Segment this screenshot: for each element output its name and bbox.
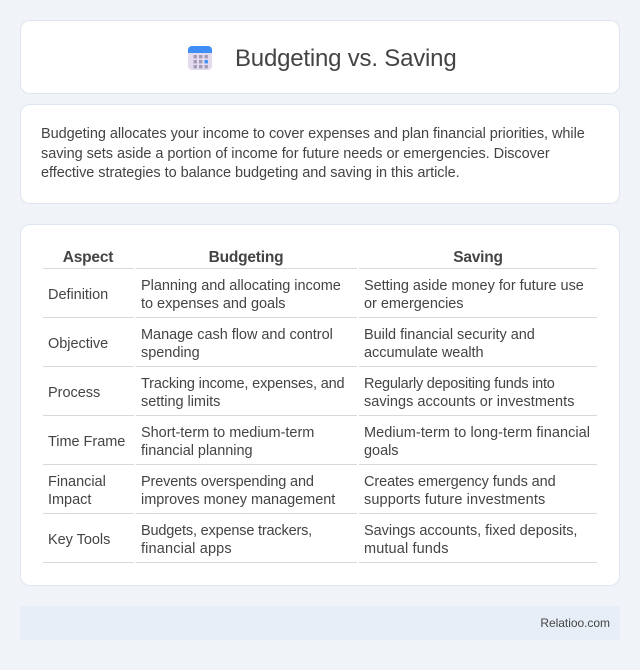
comparison table: or emergencies [364,296,464,312]
intro text: Budgeting allocates your income to cover expenses and plan financial priorities, while [41,126,585,142]
comparison table: Planning and allocating income [141,278,341,294]
comparison table: Time Frame [48,434,125,450]
row: Time Frame [48,425,590,459]
row: Financial Impact [48,474,556,508]
comparison table: Regularly depositing funds into [364,376,555,392]
comparison table: Medium-term to long-term financial [364,425,590,441]
comparison table: Definition [48,287,108,303]
comparison table: spending [141,345,200,361]
comparison table: Key Tools [48,532,110,548]
comparison table: improves money management [141,492,335,508]
comparison table: Process [48,385,100,401]
comparison table: supports future investments [364,492,545,508]
panel: header [20,20,620,94]
footer text: Relatioo.com [540,616,610,630]
icon: calendar [188,46,212,70]
row: Process [48,376,574,410]
comparison table: Setting aside money for future use [364,278,584,294]
comparison table: Savings accounts, fixed deposits, [364,523,577,539]
intro text: effective strategies to balance budgeting and saving in this article. [41,165,460,181]
row: Key Tools [48,523,577,557]
comparison table: Budgets, expense trackers, [141,523,312,539]
comparison table: Prevents overspending and [141,474,314,490]
comparison table: setting limits [141,394,220,410]
comparison table: accumulate wealth [364,345,484,361]
comparison table: mutual funds [364,541,449,557]
comparison table: Short-term to medium-term [141,425,314,441]
comparison table: goals [364,443,399,459]
column heading: Budgeting: Budgeting [209,249,283,266]
comparison table: Build financial security and [364,327,535,343]
panel: comparison table [20,224,620,586]
title: Budgeting vs. Saving [235,45,456,72]
comparison table: financial planning [141,443,253,459]
comparison table: Financial [48,474,106,490]
footer bar [20,606,620,640]
column heading: Saving: Saving [453,249,503,266]
comparison table: Creates emergency funds and [364,474,556,490]
intro text: saving sets aside a portion of income for future needs or emergencies. Discover [41,146,550,162]
comparison table: Tracking income, expenses, and [141,376,344,392]
comparison table: to expenses and goals [141,296,285,312]
column heading: Aspect: Aspect [63,249,113,266]
comparison table: Manage cash flow and control [141,327,333,343]
row: Definition [48,278,584,312]
comparison table: Objective [48,336,108,352]
comparison table: savings accounts or investments [364,394,574,410]
comparison table: financial apps [141,541,232,557]
panel: introduction [20,104,620,204]
comparison table: Impact [48,492,91,508]
row: Objective [48,327,535,361]
intro text [41,126,585,181]
